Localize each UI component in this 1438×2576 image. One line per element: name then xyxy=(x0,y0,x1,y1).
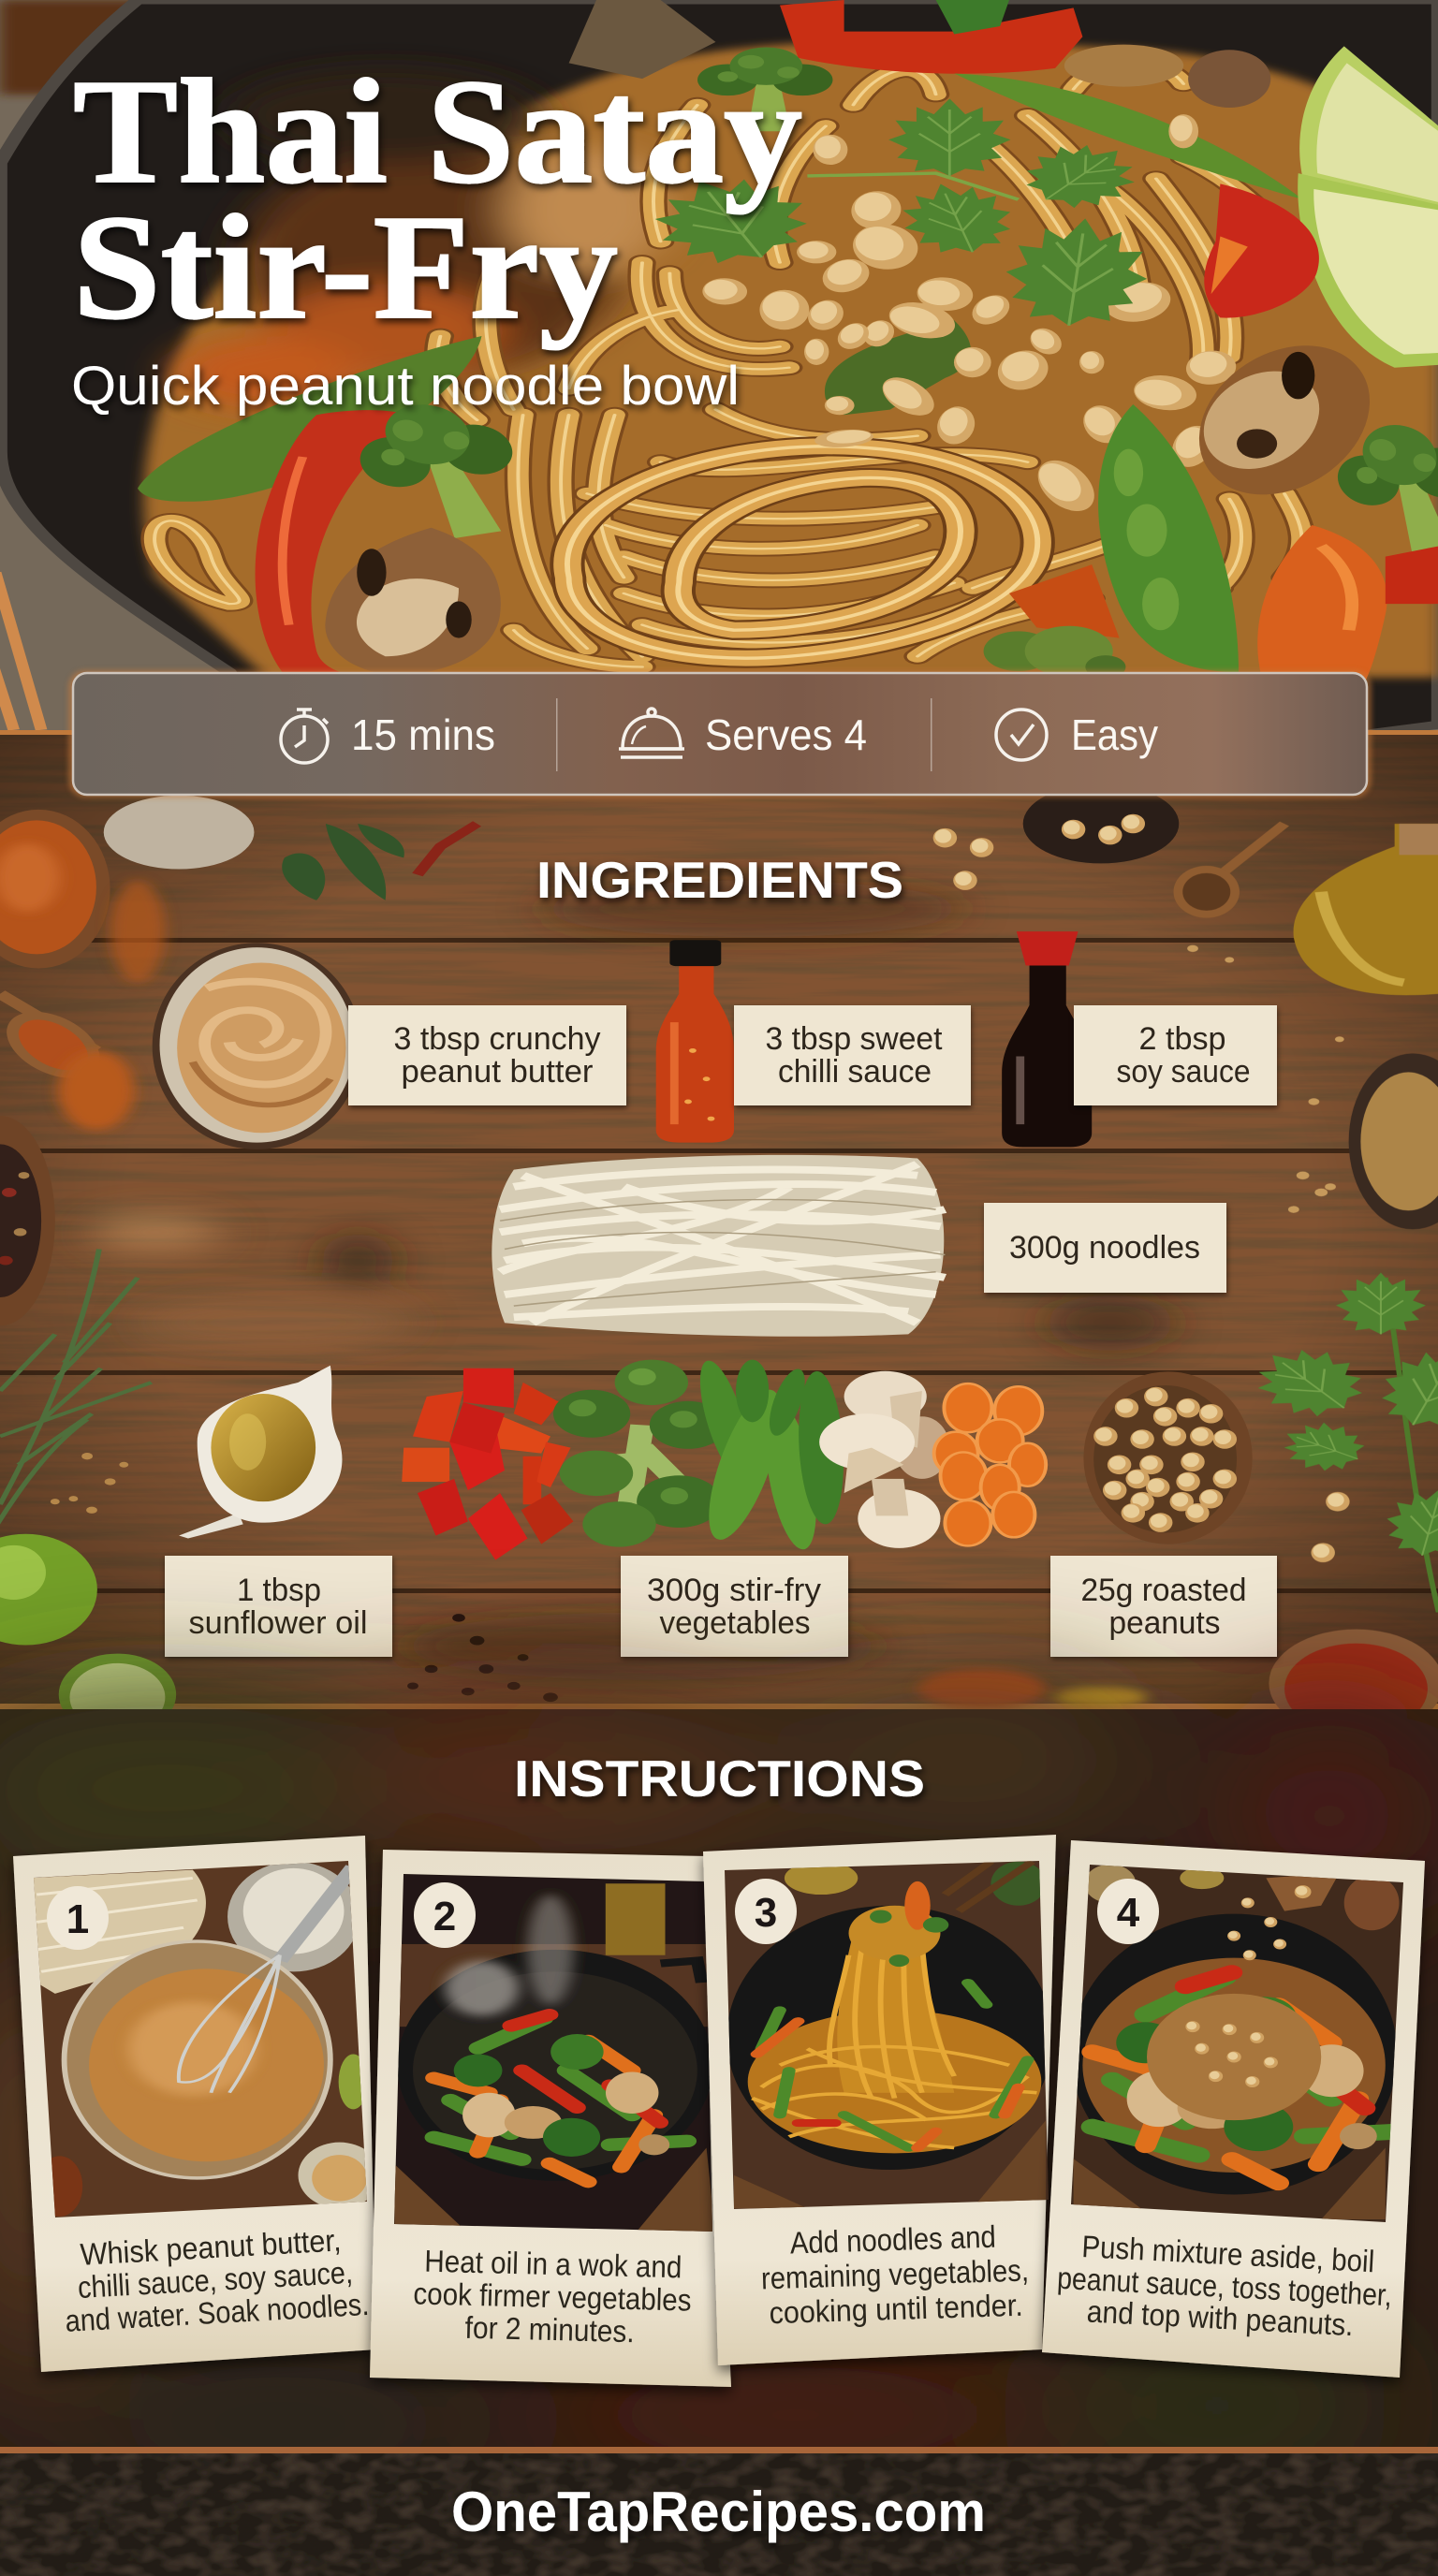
peanut butter bowl xyxy=(153,943,361,1149)
wooden spoon right xyxy=(1173,824,1284,918)
cilantro bunch xyxy=(1233,1272,1438,1612)
label: peanut butter: peanut butter xyxy=(401,1054,594,1090)
label: noodles xyxy=(984,1203,1226,1293)
snow pea left xyxy=(138,336,481,502)
heading: ingredients: INGREDIENTS xyxy=(536,851,903,909)
roasted peanut bowl xyxy=(1083,1371,1253,1544)
label: roasted peanuts: peanuts xyxy=(1108,1605,1221,1641)
label: peanut butter xyxy=(348,1005,626,1105)
snow pea right xyxy=(1098,404,1239,672)
red pepper pieces xyxy=(402,1368,573,1560)
step 3 text xyxy=(759,2218,1031,2330)
step 1 text: and water. Soak noodles. xyxy=(65,2287,370,2338)
lime half xyxy=(59,1654,176,1735)
label: chilli sauce xyxy=(734,1005,971,1105)
soy sauce bottle xyxy=(1002,931,1092,1147)
broccoli left xyxy=(339,394,548,547)
heading: instructions: INSTRUCTIONS xyxy=(514,1749,925,1808)
card 3 xyxy=(703,1835,1056,2365)
cilantro topping xyxy=(630,98,1159,329)
wok xyxy=(0,0,1438,735)
seed bowl right xyxy=(1349,1053,1438,1229)
step 2 text: cook firmer vegetables xyxy=(413,2276,692,2318)
wood strip under hero xyxy=(0,730,1438,735)
broccoli bottom xyxy=(984,626,1125,679)
icon: check circle xyxy=(996,710,1047,760)
peppercorn scatter xyxy=(407,1614,558,1702)
carrots xyxy=(1009,525,1438,694)
carrot slices xyxy=(934,1383,1046,1545)
mushroom slices background xyxy=(1064,45,1183,87)
red pepper top xyxy=(780,0,1082,74)
label: chilli sauce: 3 tbsp sweet xyxy=(766,1021,943,1057)
red pepper strip left xyxy=(256,410,413,675)
broccoli xyxy=(553,1360,726,1547)
step 1 text xyxy=(61,2221,370,2338)
panel: instructions xyxy=(0,1704,1438,2471)
rice noodle bundle xyxy=(492,1155,945,1337)
step badge 1 xyxy=(47,1886,109,1950)
photo: lifting noodles xyxy=(715,1856,1055,2214)
step badge 4: 4 xyxy=(1117,1890,1140,1936)
step badge 4 xyxy=(1097,1879,1159,1944)
red chilli xyxy=(418,824,477,875)
card 2 xyxy=(370,1850,731,2387)
small white bowl xyxy=(104,796,254,869)
step 2 text: for 2 minutes. xyxy=(464,2310,635,2349)
text: time: 15 mins xyxy=(351,710,495,759)
title xyxy=(73,48,802,350)
broccoli top xyxy=(697,47,832,131)
icon: stopwatch xyxy=(281,710,328,763)
step badge 3: 3 xyxy=(755,1890,777,1936)
label: sunflower oil xyxy=(165,1556,392,1657)
rosemary sprig xyxy=(0,1249,152,1527)
mushroom right xyxy=(1172,334,1397,505)
oil bottle xyxy=(1294,824,1438,995)
text: servings: Serves 4 xyxy=(705,710,867,759)
oil jug xyxy=(179,1366,342,1539)
step 3 text: remaining vegetables, xyxy=(760,2252,1029,2295)
step badge 3 xyxy=(735,1879,797,1944)
label: soy sauce: soy sauce xyxy=(1116,1054,1251,1090)
lime wedge upper xyxy=(1299,46,1438,210)
wood knots and patches xyxy=(92,881,1174,1680)
broccoli right xyxy=(1323,418,1438,564)
step 4 text: Push mixture aside, boil xyxy=(1081,2229,1375,2278)
step badge 1: 1 xyxy=(66,1896,89,1942)
sauce tones xyxy=(174,68,669,410)
green leaf under peanuts xyxy=(825,320,971,415)
card 1 xyxy=(13,1836,386,2372)
tan piece at top xyxy=(569,0,715,79)
spilled spice bottom xyxy=(917,1669,1147,1708)
step 3 text: Add noodles and xyxy=(789,2219,996,2260)
lime xyxy=(0,1534,97,1645)
snow peas xyxy=(690,1359,847,1551)
title: Stir-Fry xyxy=(73,183,618,350)
blurred background xyxy=(0,1704,1438,2471)
wood table background xyxy=(0,725,1438,1713)
wooden spoon with spice xyxy=(0,994,119,1089)
mushrooms xyxy=(819,1371,949,1548)
food mass xyxy=(143,40,1438,678)
chilli sauce bottle xyxy=(656,940,734,1143)
label: sunflower oil: 1 tbsp xyxy=(237,1573,321,1608)
subtitle: Quick peanut noodle bowl xyxy=(71,356,740,417)
label: stir-fry vegetables: 300g stir-fry xyxy=(647,1573,821,1608)
photo: wok with vegetables xyxy=(386,1867,725,2241)
panel: ingredients xyxy=(0,725,1438,1737)
footer xyxy=(0,2447,1438,2576)
top nut bowl xyxy=(1023,784,1179,863)
chopsticks xyxy=(0,572,41,730)
label: soy sauce: 2 tbsp xyxy=(1138,1021,1226,1057)
step 2 text xyxy=(412,2243,693,2350)
loose peanuts right xyxy=(1311,1492,1350,1562)
red pepper right xyxy=(1204,183,1319,318)
step 4 text: and top with peanuts. xyxy=(1086,2293,1355,2342)
loose peanuts top xyxy=(933,828,993,890)
photo: adding peanuts xyxy=(1064,1862,1413,2231)
label: chilli sauce: chilli sauce xyxy=(778,1054,932,1090)
peppercorn bowl xyxy=(0,1116,55,1325)
spilled spice xyxy=(58,881,165,1130)
step 1 text: Whisk peanut butter, xyxy=(80,2222,342,2272)
herb leaves xyxy=(282,824,404,900)
step 3 text: cooking until tender. xyxy=(769,2288,1023,2330)
large noodle loops xyxy=(567,446,1037,658)
icon: serving cloche xyxy=(619,709,684,757)
label: roasted peanuts: 25g roasted xyxy=(1080,1573,1247,1608)
step 2 text: Heat oil in a wok and xyxy=(424,2244,682,2284)
label: noodles: 300g noodles xyxy=(1009,1230,1200,1266)
stats bar xyxy=(68,670,1372,798)
peanut topping xyxy=(698,114,1240,516)
panel: hero photo xyxy=(0,0,1438,735)
spice bowl top left xyxy=(0,810,110,969)
step 4 text: peanut sauce, toss together, xyxy=(1056,2261,1393,2312)
mushroom bottom left xyxy=(325,528,501,675)
lime wedge lower xyxy=(1298,173,1438,368)
step 4 text xyxy=(1055,2228,1395,2344)
website: OneTapRecipes.com xyxy=(451,2481,986,2543)
label: sunflower oil: sunflower oil xyxy=(189,1605,367,1641)
step badge 2: 2 xyxy=(433,1894,456,1939)
snow pea top xyxy=(954,74,1303,199)
cloth and table behind pan xyxy=(0,0,1438,735)
label: peanut butter: 3 tbsp crunchy xyxy=(393,1021,601,1057)
spice bowl bottom right xyxy=(1269,1630,1438,1737)
label: roasted peanuts xyxy=(1050,1556,1277,1657)
base noodles xyxy=(154,63,1302,666)
label: stir-fry vegetables: vegetables xyxy=(659,1605,811,1641)
step badge 2 xyxy=(414,1882,476,1948)
herb seeds left xyxy=(51,1453,128,1514)
label: soy sauce xyxy=(1074,1005,1277,1105)
step 1 text: chilli sauce, soy sauce, xyxy=(77,2255,354,2305)
text: difficulty: Easy xyxy=(1071,710,1158,759)
seeds scatter right xyxy=(1187,945,1344,1213)
title: Thai Satay xyxy=(73,48,802,214)
photo: whisking peanut sauce xyxy=(19,1856,386,2231)
card 4 xyxy=(1042,1840,1425,2378)
label: stir-fry vegetables xyxy=(621,1556,848,1657)
